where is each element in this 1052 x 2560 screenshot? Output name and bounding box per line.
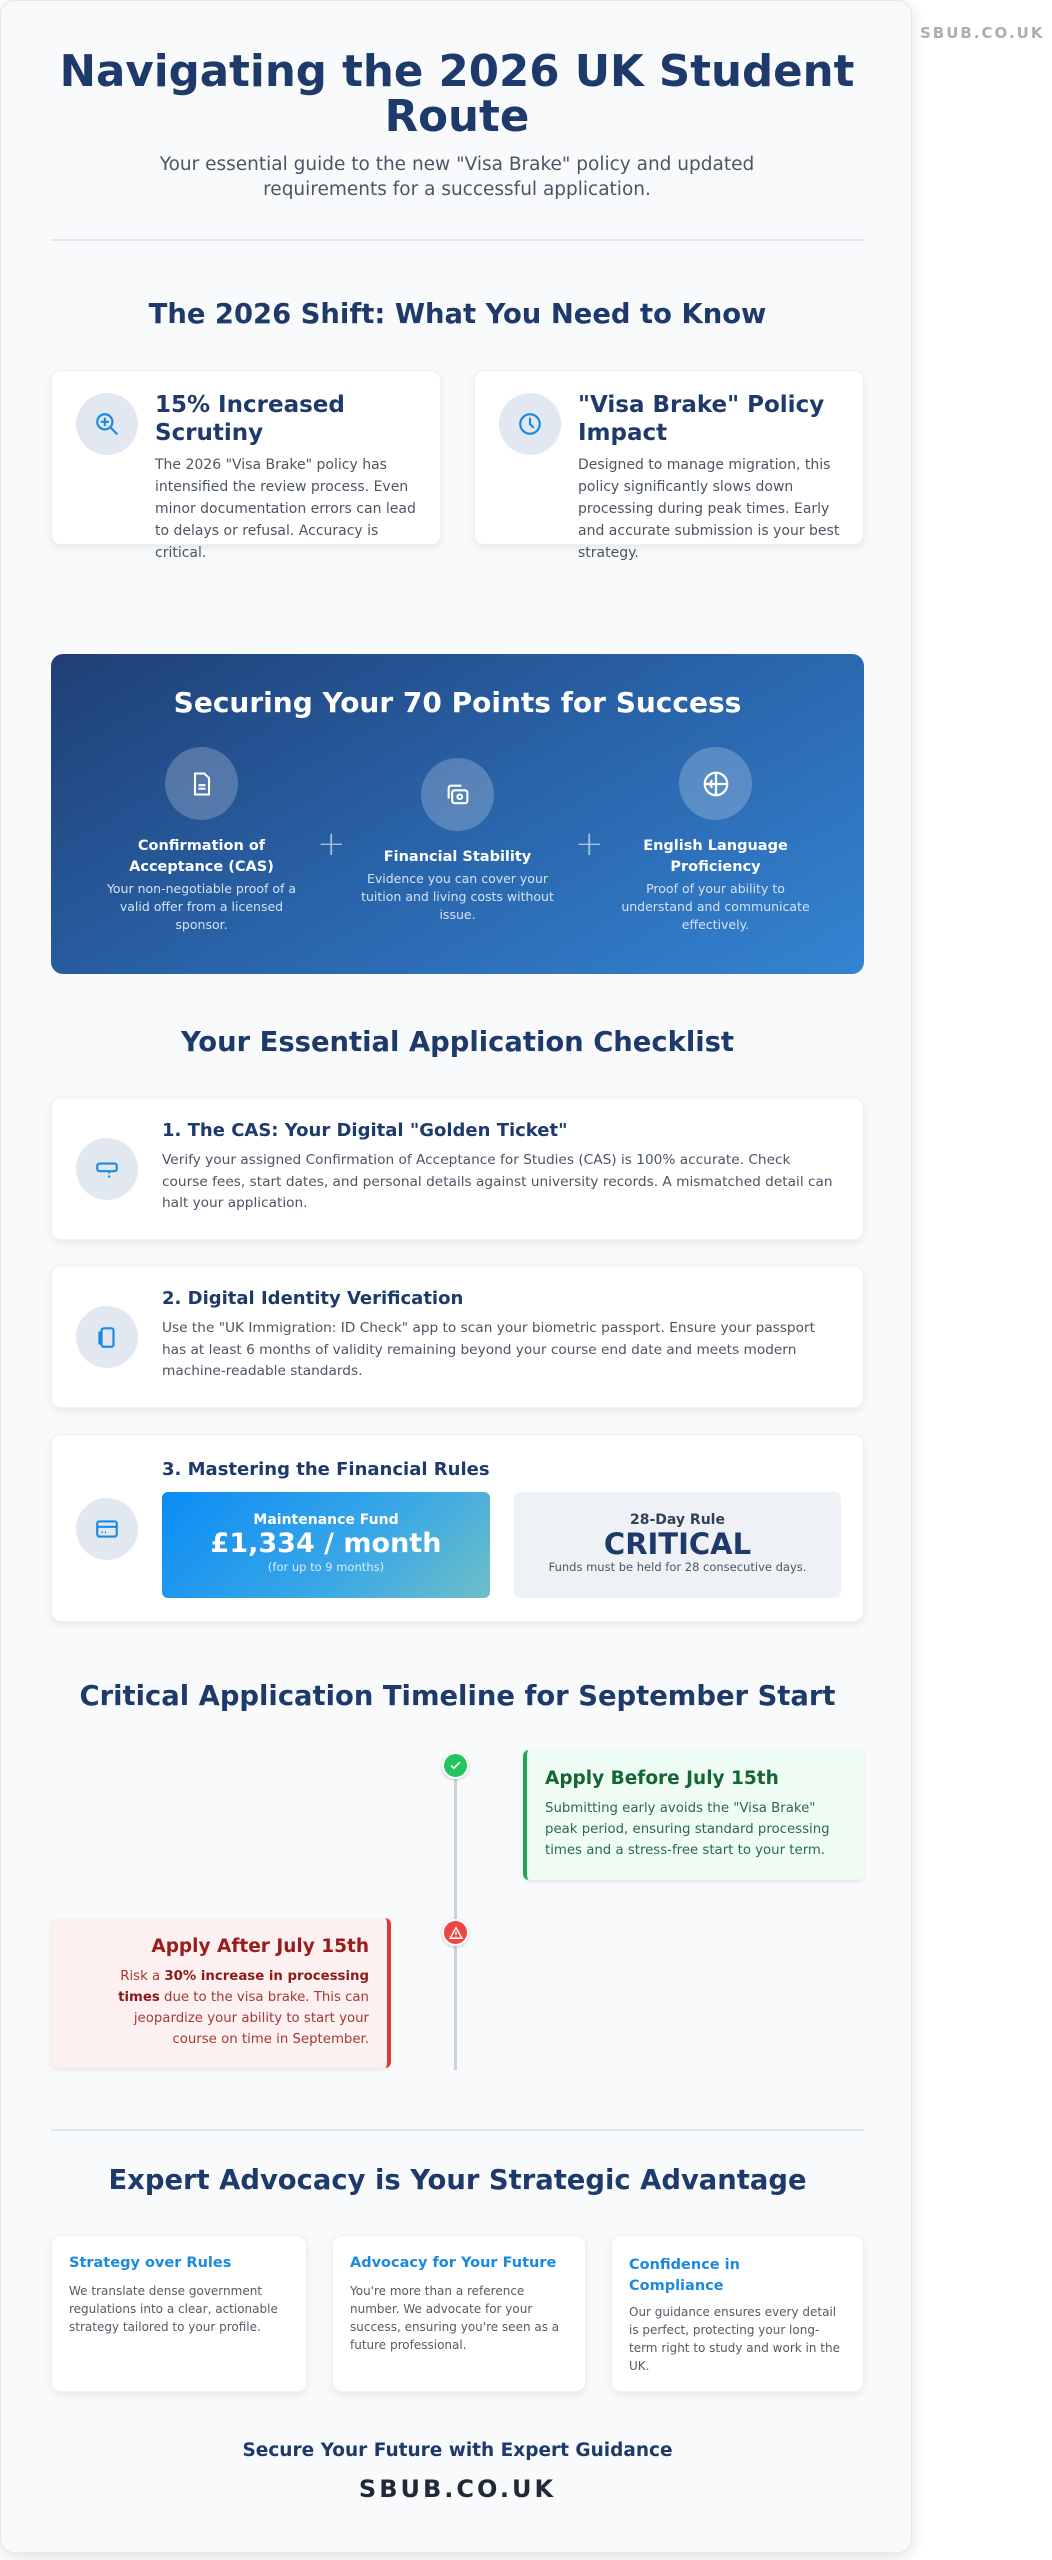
corner brand: SBUB.CO.UK [920,24,1044,42]
text: 15% Increased Scrutiny [155,392,345,446]
icon: magnifier [76,393,138,455]
heading: timeline: Critical Application Timeline for September Start [80,1681,835,1712]
stat: 28-day rule: CRITICAL [604,1527,751,1561]
timeline line [454,1765,457,2070]
heading: expert advocacy: Expert Advocacy is Your Strategic Advantage [108,2165,807,2196]
text: "Visa Brake" Policy Impact [578,392,824,446]
checklist item 1 [51,1097,864,1240]
icon: phone [76,1306,138,1368]
heading: Securing Your 70 Points for Success [174,686,741,719]
heading: 2026 shift: The 2026 Shift: What You Need to Know [149,299,766,330]
checklist item 3 [51,1434,864,1622]
stat: 28-day rule: 28-Day Rule [630,1512,725,1528]
body text: The 2026 "Visa Brake" policy has intensified the review process. Even minor documentation errors can lead to delays or refusal. Accuracy is critical. [155,457,416,561]
icon: clock [499,393,561,455]
callout: after july [51,1918,391,2068]
panel: 70 points [51,654,864,974]
plus 2: + [575,824,604,864]
card: strategy: We translate dense government regulations into a clear, actionable strategy tailored to your profile. [69,2284,278,2334]
item: finance: Evidence you can cover your tuition and living costs without issue. [361,871,554,922]
text: 1. The CAS: Your Digital "Golden Ticket" [162,1120,567,1141]
stat: maintenance fund: £1,334 / month [211,1528,441,1559]
icon: warning dot [442,1919,469,1946]
stat: maintenance fund: Maintenance Fund [253,1512,399,1528]
plus 1: + [317,824,346,864]
card: advocacy: Advocacy for Your Future [350,2255,556,2271]
text: 2. Digital Identity Verification [162,1288,463,1309]
footer brand: SBUB.CO.UK [359,2475,556,2503]
item: CAS: Confirmation of Acceptance (CAS) [129,838,274,875]
stat: maintenance fund: (for up to 9 months) [268,1560,384,1574]
text: 3. Mastering the Financial Rules [162,1459,490,1480]
checklist item 2 [51,1265,864,1408]
icon: card [76,1498,138,1560]
icon: document [165,747,238,820]
item: CAS [107,747,296,932]
card: confidence [611,2235,864,2392]
icon: globe [679,747,752,820]
callout: before july [523,1750,864,1880]
item: finance: Financial Stability [384,849,531,865]
panel: increased scrutiny [51,370,441,545]
card: advocacy [332,2235,586,2392]
callout: before july: Submitting early avoids the "Visa Brake" peak period, ensuring standard processing times and a stress-free start to your term. [545,1801,830,1858]
checklist item 2: Use the "UK Immigration: ID Check" app to scan your biometric passport. Ensure your passport has at least 6 months of validity remaining beyond your course end date and meets modern machine-readable standards. [162,1320,815,1379]
callout: after july: Risk a 30% increase in processing times due to the visa brake. This can jeopardize your ability to start your course on time in September. [118,1969,369,2047]
icon: money [421,758,494,831]
item: english [621,747,810,932]
card: confidence: Our guidance ensures every detail is perfect, protecting your long-term right to study and work in the UK. [629,2305,840,2373]
checklist item 1: Verify your assigned Confirmation of Acceptance for Studies (CAS) is 100% accurate. Check course fees, start dates, and personal details against university records. A mismatched detail can halt your application. [162,1152,833,1211]
item: finance [361,758,554,922]
item: english: English Language Proficiency [643,838,788,875]
card: advocacy: You're more than a reference number. We advocate for your success, ensuring you're seen as a future professional. [350,2284,559,2352]
card: strategy [51,2235,307,2392]
footer cta: Secure Your Future with Expert Guidance [242,2440,673,2461]
card: strategy: Strategy over Rules [69,2255,231,2271]
subtitle: Your essential guide to the new "Visa Brake" policy and updated requirements for a successful application. [160,154,754,200]
item: CAS: Your non-negotiable proof of a valid offer from a licensed sponsor. [107,881,296,932]
card: confidence: Confidence in Compliance [629,2257,740,2294]
body text 2: Designed to manage migration, this policy significantly slows down processing during peak times. Early and accurate submission is your best strategy. [578,457,839,561]
stat: 28-day rule [514,1492,841,1598]
icon: ticket [76,1138,138,1200]
panel: visa brake impact [474,370,864,545]
heading: checklist: Your Essential Application Checklist [181,1027,734,1058]
callout: after july: Apply After July 15th [151,1936,369,1957]
title: Navigating the 2026 UK Student Route [60,47,854,142]
stat: maintenance fund [162,1492,490,1598]
stat: 28-day rule: Funds must be held for 28 consecutive days. [549,1560,806,1574]
callout: before july: Apply Before July 15th [545,1768,779,1789]
icon: check dot [442,1752,469,1779]
item: english: Proof of your ability to understand and communicate effectively. [621,881,810,932]
